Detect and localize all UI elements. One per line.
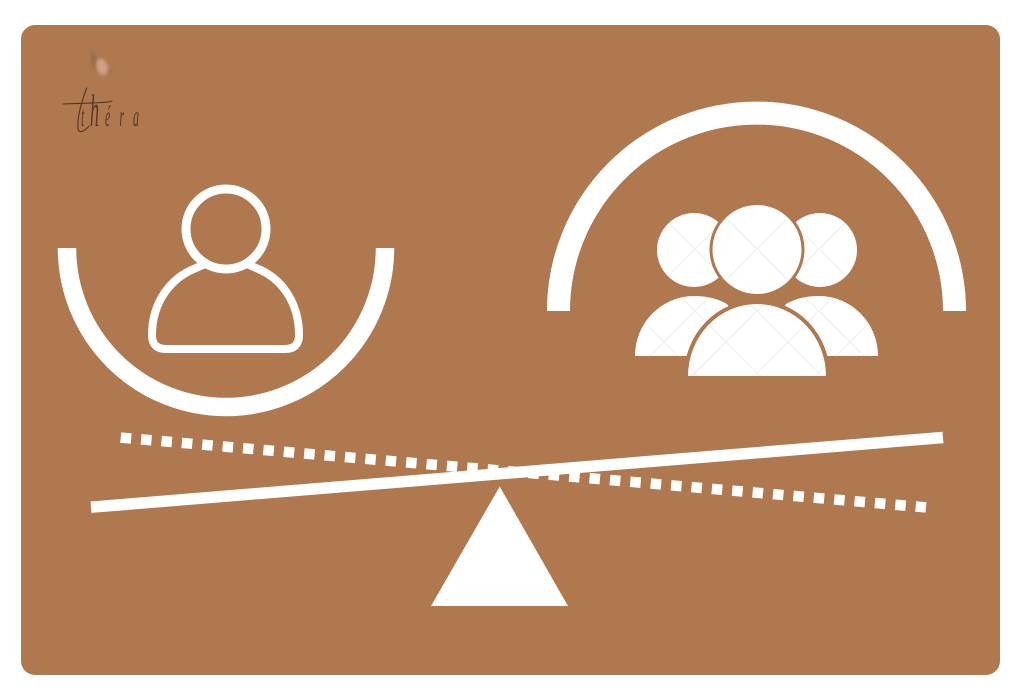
icon: left person body <box>635 296 760 356</box>
logo: thera signature <box>63 51 148 137</box>
group: three people under a dome arc <box>558 113 954 376</box>
icon: three people <box>635 205 878 376</box>
icon: left person head <box>657 213 731 287</box>
icon: person body outline <box>152 264 299 349</box>
arc: lower semicircle around individual <box>67 248 385 407</box>
icon: person head outline <box>186 189 266 269</box>
seesaw <box>91 438 943 606</box>
dotted beam: previous tilt <box>121 438 926 507</box>
triangle: fulcrum <box>431 486 568 606</box>
individual group: single person in a bowl arc <box>67 189 385 407</box>
logo wordmark: éra <box>105 100 148 133</box>
logo wordmark: h <box>90 87 99 137</box>
icon: right person body <box>753 296 878 356</box>
logo flourish stroke <box>63 88 112 132</box>
logo wordmark: t <box>81 100 85 133</box>
icon: right person head <box>783 213 857 287</box>
icon: logo butterfly mark <box>90 51 112 77</box>
icon: centre person body <box>688 304 826 376</box>
icon: centre person head <box>712 205 802 294</box>
solid beam: current tilt <box>91 438 943 507</box>
arc: upper semicircle over group <box>558 113 954 311</box>
